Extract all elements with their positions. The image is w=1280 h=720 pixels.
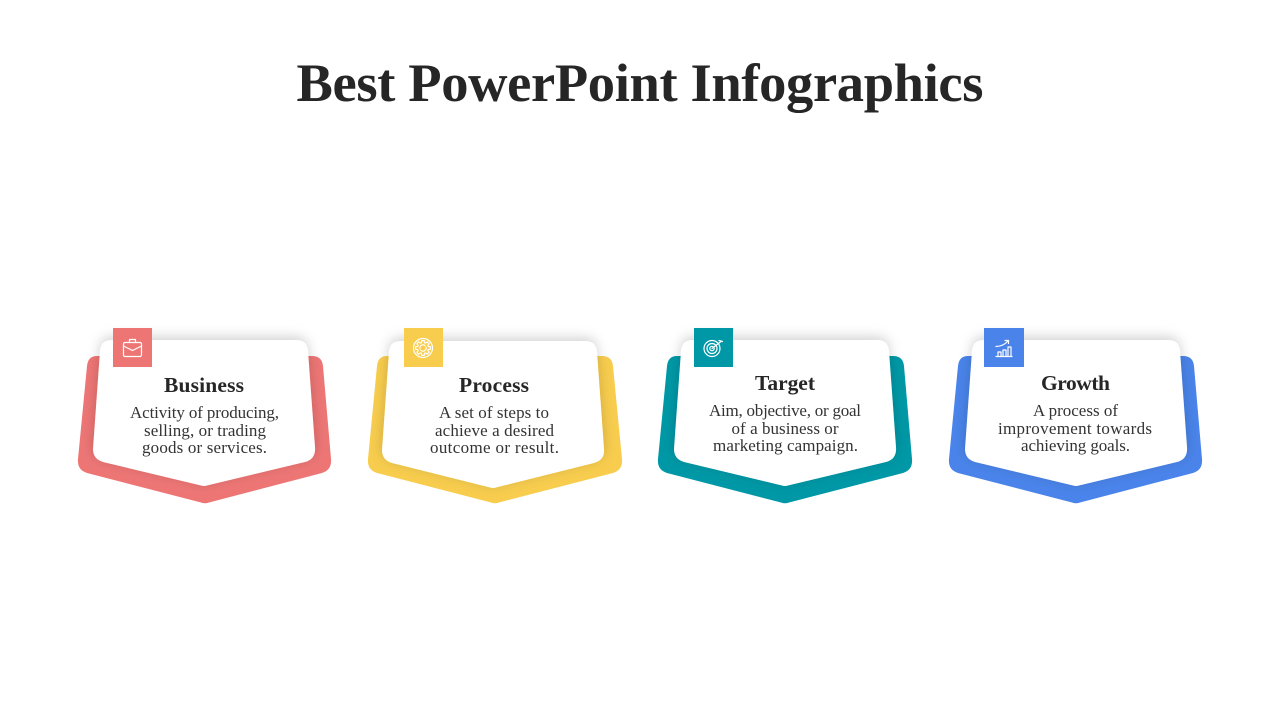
text: process description: outcome or result. [430,438,559,457]
icon tab: target [694,328,733,367]
title: Best PowerPoint Infographics [296,52,984,113]
icon tab: business [113,328,152,367]
icon: briefcase [124,340,142,356]
text: growth description [998,401,1152,455]
panel: target [658,328,912,503]
heading: business: Business [164,373,244,397]
icon: target [704,340,722,356]
inner card: growth [965,340,1187,486]
panel: business [78,328,331,503]
inner card: business [93,340,315,486]
heading: growth: Growth [1041,371,1110,395]
text: growth description: achieving goals. [1021,436,1130,455]
text: process description [430,403,559,457]
heading: target: Target [755,371,816,395]
icon tab: growth [984,328,1024,367]
text: business description [130,403,279,457]
icon: growth chart [996,340,1012,356]
icon tab: process [404,328,443,367]
text: target description: marketing campaign. [713,436,858,455]
text: target description: Aim, objective, or goal [709,401,861,420]
text: business description: Activity of producing, [130,403,279,422]
inner card: process [382,341,604,488]
outer shape: business [78,356,331,503]
text: process description: A set of steps to [439,403,549,422]
text: business description: goods or services. [142,438,267,457]
text: business description: selling, or trading [144,421,266,440]
text: growth description: improvement towards [998,419,1152,438]
icon: gear in circle [414,338,432,358]
inner card: target [674,340,896,486]
panel: growth [949,328,1202,503]
text: growth description: A process of [1033,401,1118,420]
text: process description: achieve a desired [435,421,554,440]
outer shape: process [368,356,622,503]
outer shape: target [658,356,912,503]
text: target description: of a business or [732,419,839,438]
outer shape: growth [949,356,1202,503]
heading: process: Process [459,373,529,397]
panel: process [368,328,622,503]
text: target description [709,401,861,455]
